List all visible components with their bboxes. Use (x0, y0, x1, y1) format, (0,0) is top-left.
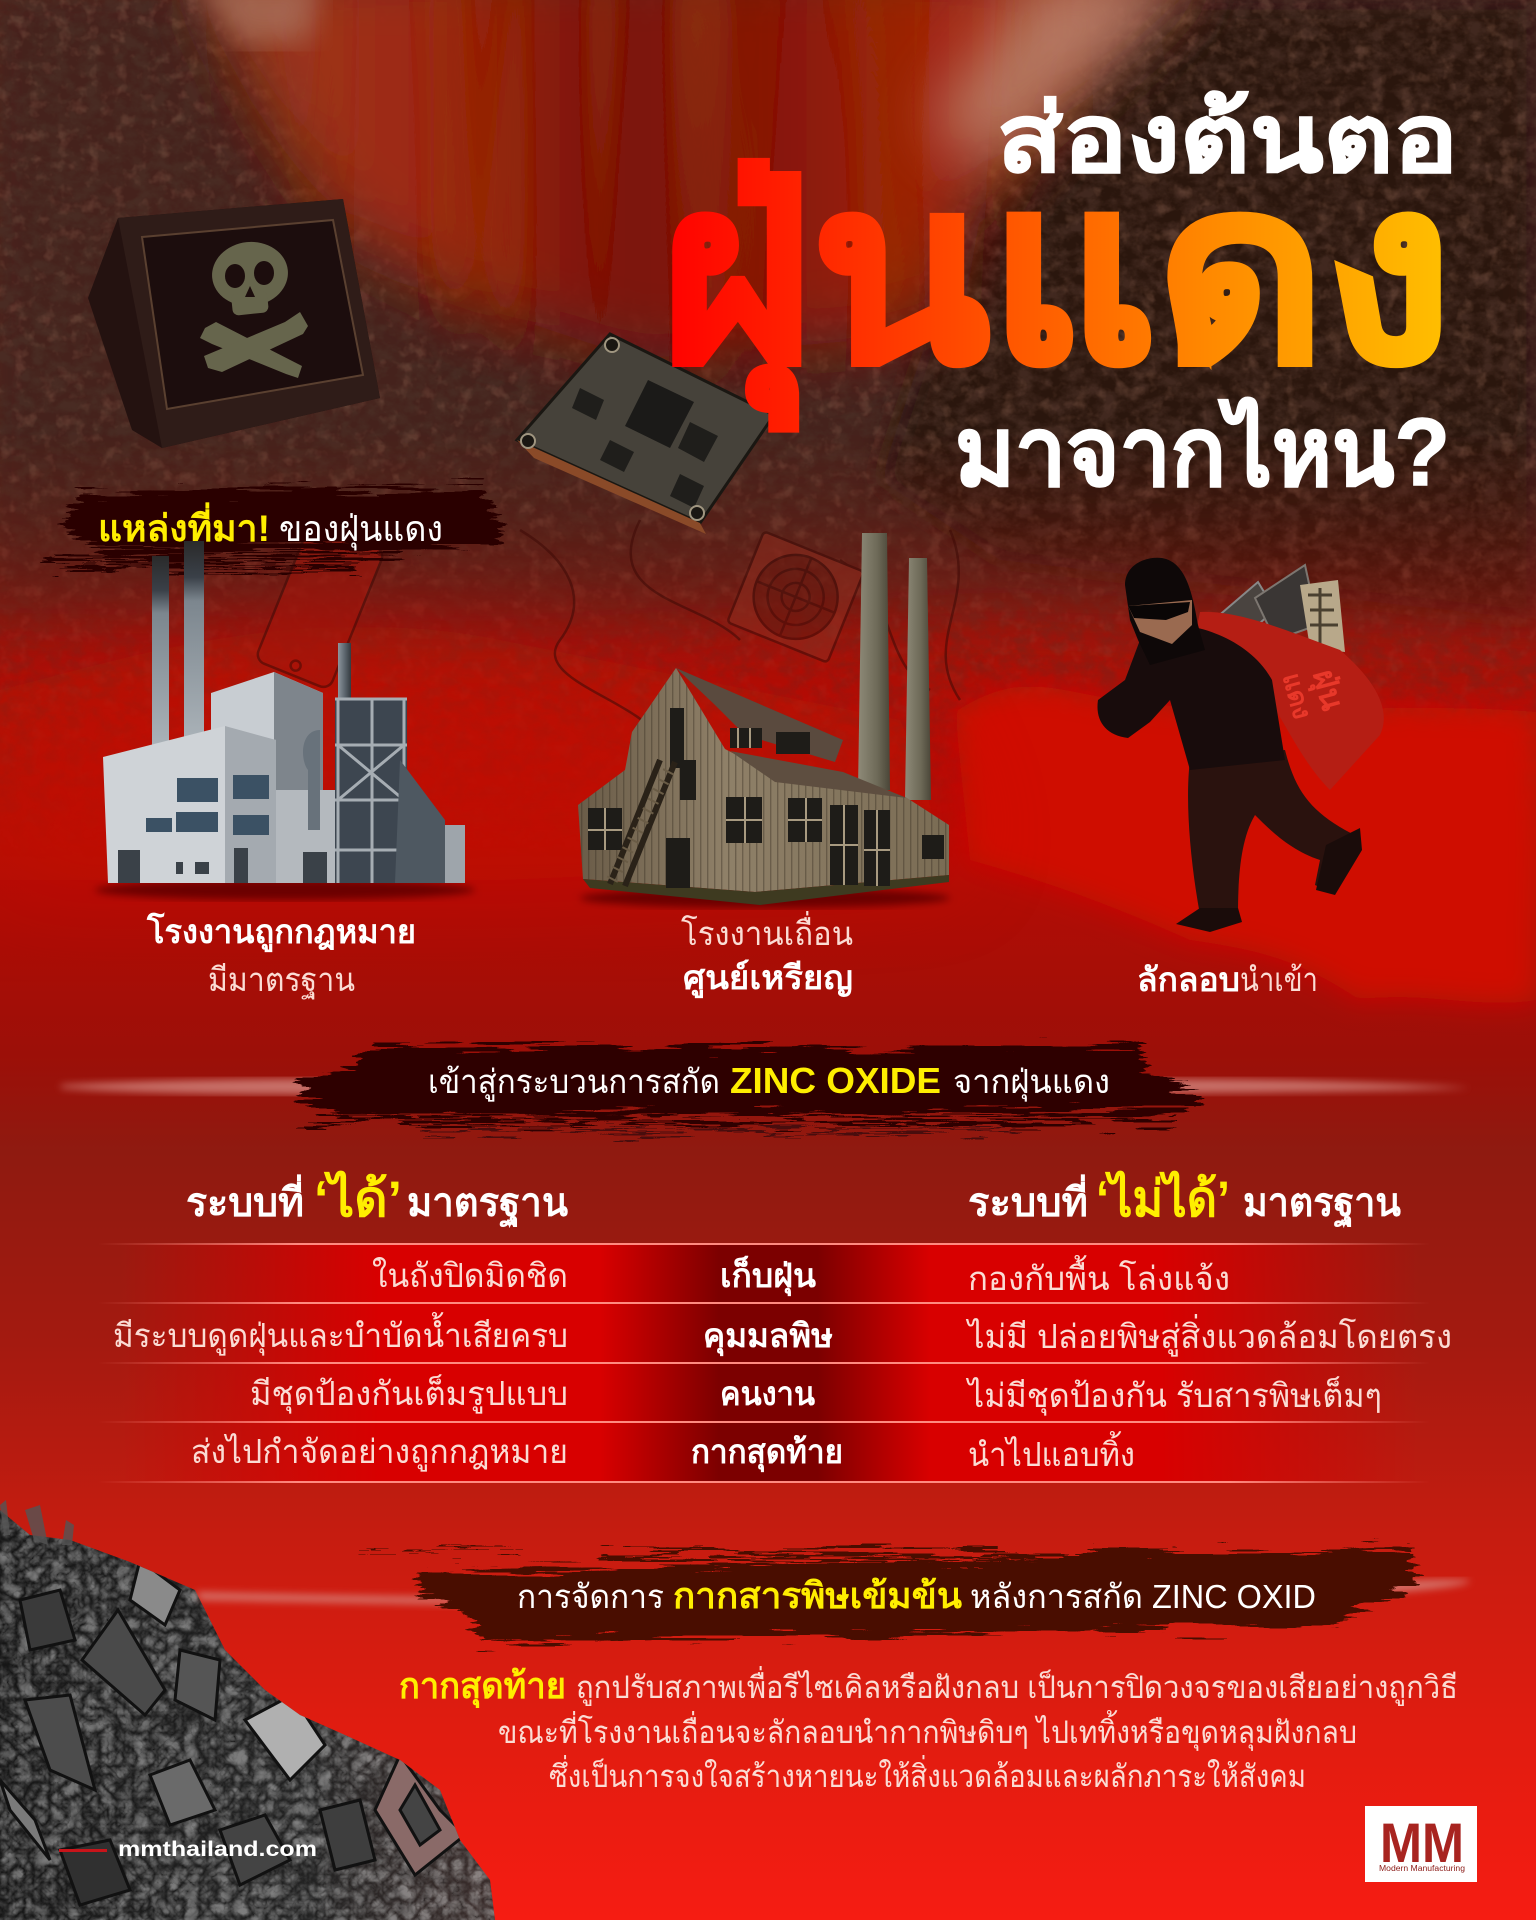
heading text (517, 1575, 1316, 1616)
caption: illegal factory: ศูนย์เหรียญ (683, 959, 853, 999)
column: topics: คุมมลพิษ (703, 1317, 833, 1357)
caption: legal factory: โรงงานถูกกฎหมาย (146, 912, 416, 953)
icon: illegal factory (578, 533, 950, 908)
header: standard (186, 1170, 568, 1229)
icon: antennas on pile (0, 1500, 74, 1545)
pale brush line (196, 1580, 1470, 1608)
rock hills (0, 0, 1536, 860)
face (1128, 600, 1192, 644)
red dust plume (200, 0, 1190, 360)
caption: legal factory: มีมาตรฐาน (208, 961, 355, 1000)
icon: circuit board (517, 334, 774, 534)
icon: smuggler (1097, 558, 1384, 932)
sack label (1277, 661, 1351, 722)
header: standard: ระบบที่ (186, 1174, 304, 1225)
skull icon (200, 238, 308, 378)
website (59, 1838, 317, 1861)
paragraph: ถูกปรับสภาพเพื่อรีไซเคิลหรือฝังกลบ เป็นการปิดวงจรของเสียอย่างถูกวิธี (576, 1666, 1458, 1706)
column: standard (113, 1257, 568, 1472)
red splash (955, 686, 1536, 1003)
caption: illegal factory: โรงงานเถื่อน (681, 911, 853, 952)
paragraph (399, 1665, 1458, 1794)
header: standard: ‘ได้’ (314, 1170, 402, 1227)
heading: sources: ของฝุ่นแดง (279, 508, 443, 551)
caption: smuggler: ลักลอบ (1137, 961, 1240, 998)
caption: illegal factory (681, 911, 853, 999)
column: standard: ส่งไปกำจัดอย่างถูกกฎหมาย (191, 1433, 568, 1472)
icon: skull monitor (88, 199, 380, 448)
panel: process heading (61, 1046, 1470, 1133)
column: non-standard: กองกับพื้น โล่งแจ้ง (968, 1255, 1230, 1297)
icon: cooling fan (727, 531, 864, 663)
title line 2: ฝุ่นแดง (660, 133, 1452, 430)
caption: smuggler: นำเข้า (1240, 961, 1318, 998)
debris outlines (255, 520, 960, 740)
caption: legal factory (146, 912, 416, 1000)
pale brush line (61, 1078, 1470, 1095)
centre band (600, 1244, 930, 1482)
title (660, 86, 1458, 506)
brush banner (295, 1046, 1198, 1133)
heading text: ZINC OXIDE (730, 1060, 941, 1101)
column: non-standard: ไม่มีชุดป้องกัน รับสารพิษเต็มๆ (965, 1376, 1382, 1416)
heading text: หลังการสกัด ZINC OXID (970, 1578, 1316, 1615)
sack (1190, 612, 1384, 790)
column: topics: คนงาน (720, 1375, 815, 1412)
icon: legal factory (95, 541, 475, 900)
paragraph: ซึ่งเป็นการจงใจสร้างหายนะให้สิ่งแวดล้อมและผลักภาระให้สังคม (549, 1755, 1306, 1794)
icon: phone (255, 521, 385, 690)
header: non-standard: ‘ไม่ได้’ (1096, 1170, 1230, 1227)
column: non-standard: ไม่มี ปล่อยพิษสู่สิ่งแวดล้อมโดยตรง (965, 1314, 1452, 1357)
caption: smuggler (1137, 961, 1318, 998)
brush banner: sources (50, 488, 505, 570)
row backgrounds (120, 1244, 1420, 1482)
e-waste in sack (1216, 565, 1345, 652)
brush banner (360, 1548, 1416, 1642)
heading text: การจัดการ (517, 1578, 664, 1615)
paragraph: ขณะที่โรงงานเถื่อนจะลักลอบนำกากพิษดิบๆ ไปเททิ้งหรือขุดหลุมฝังกลบ (498, 1710, 1357, 1752)
header: non-standard: มาตรฐาน (1243, 1181, 1401, 1229)
heading: sources (98, 502, 443, 551)
heading text: เข้าสู่กระบวนการสกัด (428, 1063, 720, 1102)
sack label: ฝุ่น (1303, 665, 1351, 715)
balaclava (1125, 558, 1205, 665)
header: standard: มาตรฐาน (407, 1181, 568, 1229)
website: mmthailand.com (118, 1838, 317, 1861)
heading text: จากฝุ่นแดง (953, 1063, 1110, 1102)
column: standard: ในถังปิดมิดชิด (372, 1257, 568, 1294)
column: standard: มีชุดป้องกันเต็มรูปแบบ (250, 1374, 568, 1414)
pants (1188, 750, 1360, 915)
heading: sources: แหล่งที่มา! (98, 502, 270, 549)
header: non-standard (968, 1170, 1401, 1229)
torso (1097, 625, 1285, 770)
column: standard: มีระบบดูดฝุ่นและบำบัดน้ำเสียครบ (113, 1312, 568, 1356)
paragraph: กากสุดท้าย (399, 1665, 566, 1709)
column: non-standard: นำไปแอบทิ้ง (968, 1431, 1135, 1473)
heading text: กากสารพิษเข้มข้น (673, 1575, 962, 1616)
panel: residue (196, 1548, 1470, 1794)
heading text (428, 1060, 1110, 1102)
logo (1365, 1806, 1477, 1882)
sack label: แดง (1277, 670, 1318, 722)
header: non-standard: ระบบที่ (968, 1174, 1088, 1225)
comparison table (98, 1170, 1452, 1483)
title line 1: ส่องต้นตอ (997, 86, 1458, 191)
column: topics (691, 1255, 843, 1473)
panel: sources (50, 488, 1384, 1000)
e-waste pile (0, 1500, 520, 1920)
logo: MM (1380, 1811, 1464, 1874)
column: topics: กากสุดท้าย (691, 1433, 843, 1473)
logo: Modern Manufacturing (1379, 1864, 1465, 1873)
column: non-standard (965, 1255, 1452, 1473)
title line 3: มาจากไหน? (955, 397, 1450, 506)
column: topics: เก็บฝุ่น (720, 1255, 816, 1297)
